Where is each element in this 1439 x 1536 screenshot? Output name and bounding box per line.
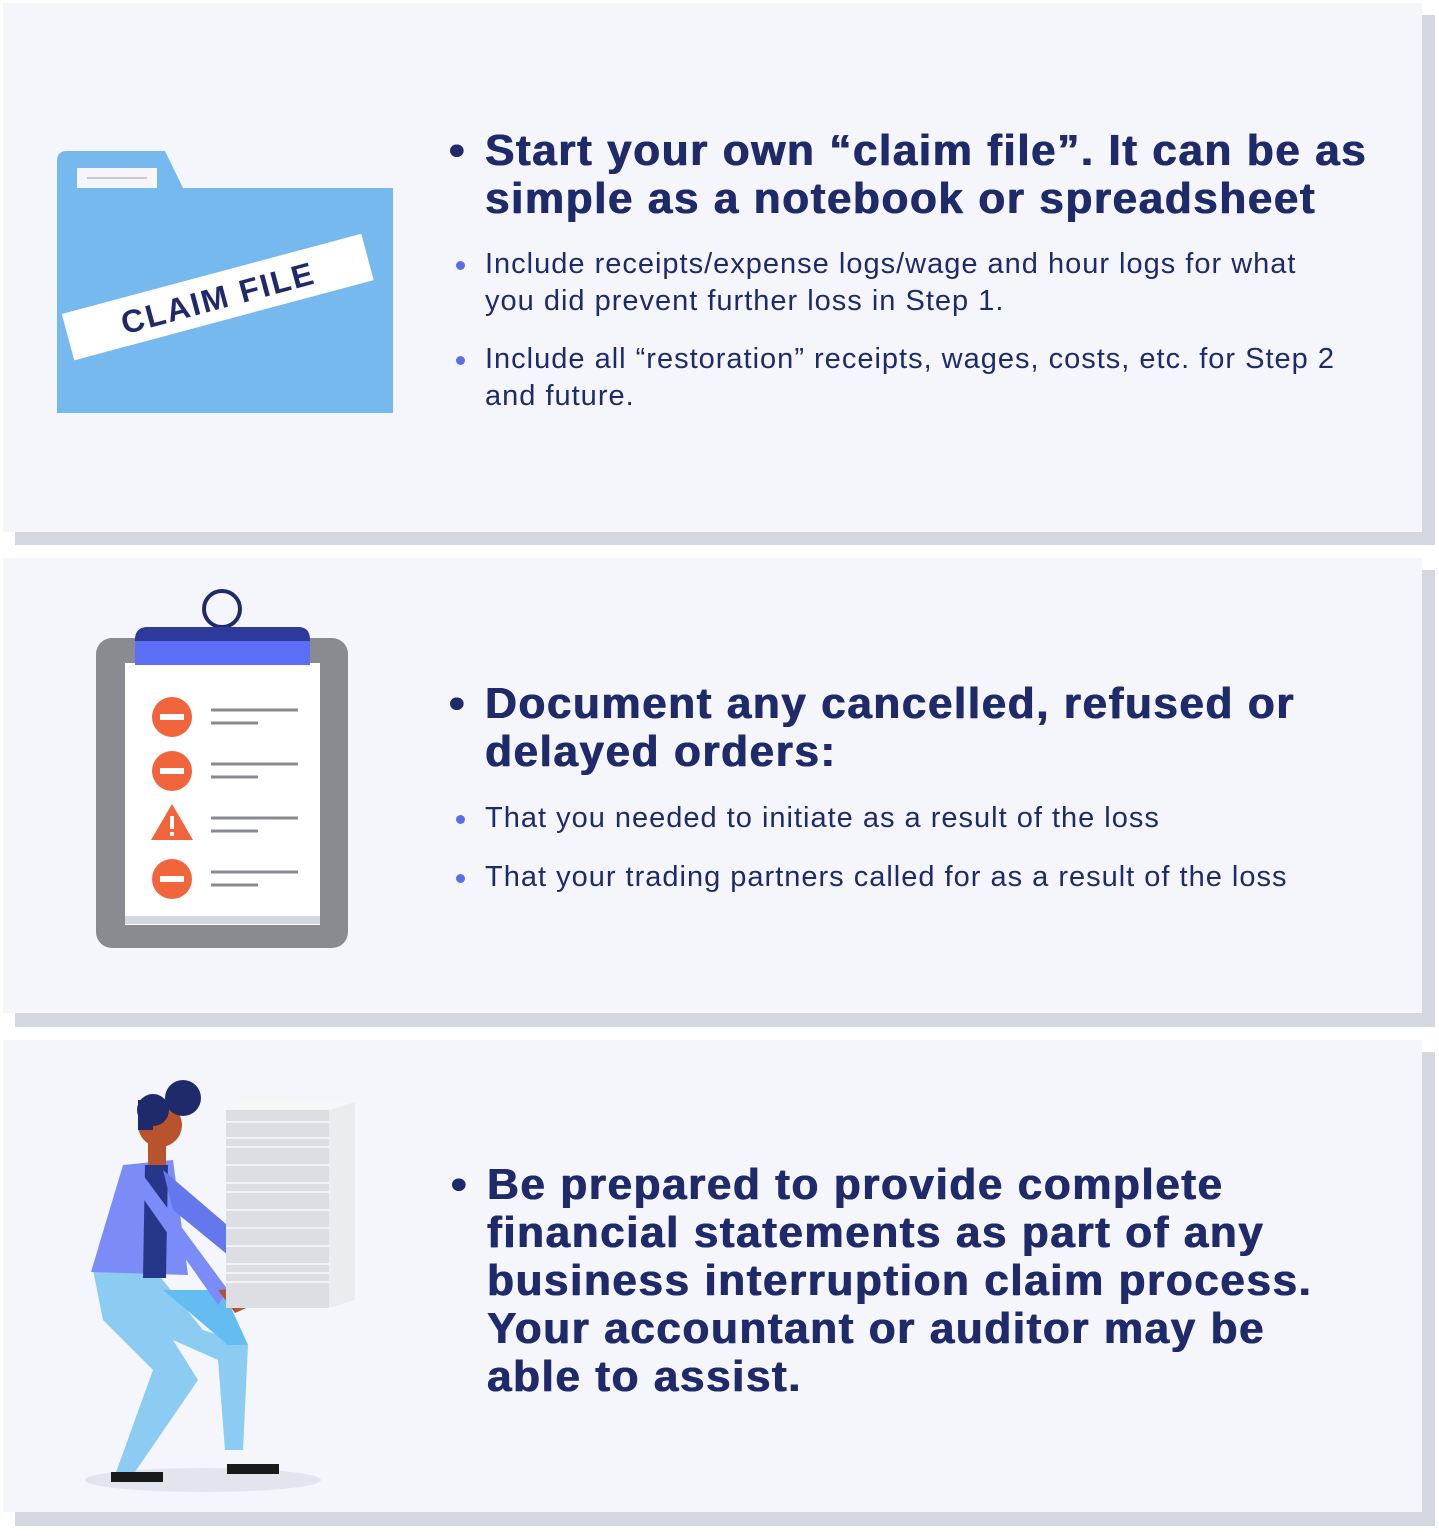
panel: financial statements bbox=[3, 1040, 1422, 1512]
bullet 1a: you did prevent further loss in Step 1. bbox=[485, 285, 1004, 317]
heading 3 bbox=[451, 1160, 1312, 1401]
icon: folder bbox=[57, 151, 393, 413]
bullet 2b: That your trading partners called for as a result of the loss bbox=[485, 861, 1287, 893]
heading 3: Your accountant or auditor may be bbox=[487, 1304, 1265, 1353]
bullet 2a: That you needed to initiate as a result of the loss bbox=[485, 802, 1160, 834]
panel: claim file bbox=[3, 3, 1422, 532]
heading 3: financial statements as part of any bbox=[487, 1208, 1264, 1257]
bullet 1b: Include all “restoration” receipts, wages, costs, etc. for Step 2 bbox=[485, 343, 1335, 375]
bullet 1a bbox=[485, 246, 1296, 320]
panel: claim file: • bbox=[449, 126, 466, 175]
bullet 1b: and future. bbox=[485, 380, 635, 412]
bullet 1b bbox=[485, 341, 1335, 415]
heading 3: business interruption claim process. bbox=[487, 1256, 1312, 1305]
panel: orders bbox=[3, 558, 1422, 1013]
heading 2: delayed orders: bbox=[485, 727, 837, 776]
heading 2: Document any cancelled, refused or bbox=[485, 679, 1295, 728]
icon: folder: CLAIM FILE bbox=[117, 255, 319, 341]
heading 1 bbox=[449, 126, 1367, 223]
bullet 1a: Include receipts/expense logs/wage and hour logs for what bbox=[485, 248, 1296, 280]
icon: clipboard bbox=[96, 589, 348, 948]
icon: person carrying papers bbox=[85, 1080, 355, 1492]
heading 3: able to assist. bbox=[487, 1352, 802, 1401]
heading 3: Be prepared to provide complete bbox=[487, 1160, 1224, 1209]
panel: financial statements: • bbox=[451, 1160, 468, 1209]
panel: orders: • bbox=[449, 679, 466, 728]
heading 1: simple as a notebook or spreadsheet bbox=[485, 174, 1316, 223]
heading 2 bbox=[449, 679, 1295, 776]
heading 1: Start your own “claim file”. It can be as bbox=[485, 126, 1367, 175]
